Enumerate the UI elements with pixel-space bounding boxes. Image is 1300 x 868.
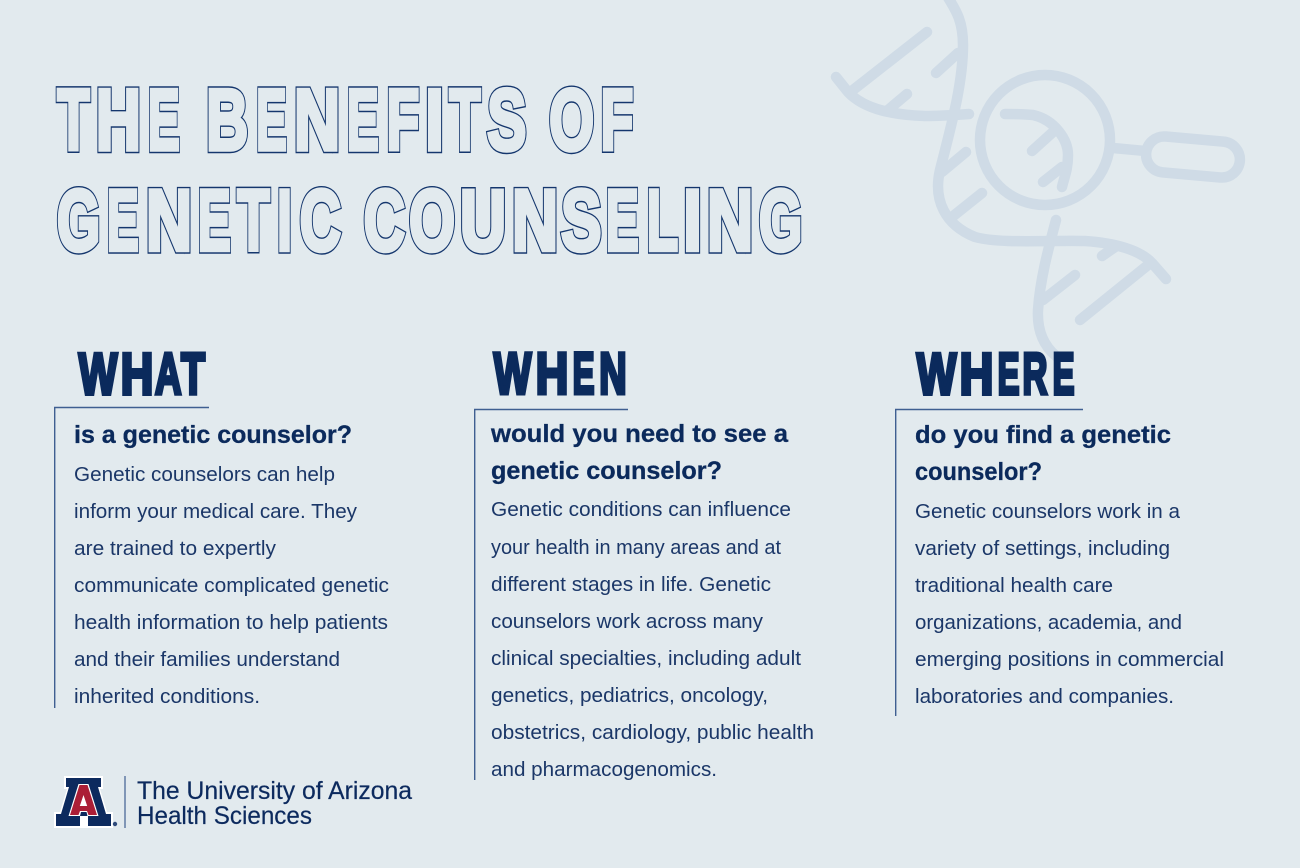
title: G [57,173,100,269]
body text: where [915,501,1224,708]
title: B [206,72,248,168]
title: F [387,72,419,168]
title: T [237,173,270,269]
wordmark: Health Sciences [137,802,312,830]
title: G [57,173,100,269]
title: T [57,72,90,168]
title: N [146,173,192,269]
title: T [449,72,480,168]
title: I [277,173,292,269]
title: E [256,72,287,168]
body text: when: different stages in life. Genetic [491,574,771,596]
body text: what: Genetic counselors can help [74,464,335,486]
title: E [347,72,379,168]
title: F [601,72,633,168]
body text: where: organizations, academia, and [915,612,1182,634]
title: H [96,72,141,168]
heading: WHEN: N [599,342,627,406]
title: C [300,173,341,269]
icon: DNA helix with magnifying glass [836,0,1241,356]
body text: when: obstetrics, cardiology, public health [491,722,814,744]
title: N [294,72,340,168]
body text: what: inherited conditions. [74,686,260,708]
title: E [606,173,639,269]
panel: what [55,342,389,708]
title: I [425,72,444,168]
title: E [107,173,139,269]
body text: where: Genetic counselors work in a [915,501,1181,523]
body text: what [74,464,389,708]
title: O [549,72,594,168]
heading: WHEN: H [536,342,568,406]
heading: WHEN: E [573,342,594,406]
bracket rule: when [475,410,628,780]
body text: when: your health in many areas and at [491,537,781,559]
heading: WHERE: E [1053,342,1074,407]
body text: where: laboratories and companies. [915,686,1174,708]
title: C [364,173,405,269]
title: F [601,72,633,168]
title: E [256,72,287,168]
title: N [294,72,340,168]
title: S [561,173,601,269]
title: F [387,72,419,168]
body text: what: are trained to expertly [74,538,276,560]
panel: when [475,342,814,781]
wordmark [137,777,412,830]
subheading: what: is a genetic counselor? [74,421,352,449]
bracket rule: where [896,410,1083,716]
title: T [237,173,270,269]
title: H [96,72,141,168]
title: C [364,173,405,269]
wordmark: The University of Arizona [137,777,412,805]
title: G [759,173,802,269]
body text: where: traditional health care [915,575,1113,597]
title: N [512,173,558,269]
title: T [57,72,90,168]
title: E [148,72,180,168]
title: I [683,173,702,269]
heading: WHAT: T [181,342,205,407]
title: S [561,173,601,269]
subheading: where: counselor? [915,458,1042,486]
panel: where [896,342,1224,716]
title: G [759,173,802,269]
title: O [409,173,455,269]
subheading: when: genetic counselor? [491,457,722,485]
title: T [449,72,480,168]
title: C [300,173,341,269]
title: S [487,72,526,168]
icon: block A [54,776,117,828]
subheading: when: would you need to see a [490,420,789,448]
body text: when: Genetic conditions can influence [491,499,791,521]
title: U [460,173,506,269]
heading: WHAT: A [155,342,182,407]
body text: when: clinical specialties, including adult [491,648,801,670]
title: E [198,173,231,269]
title: L [647,173,678,269]
heading: WHERE: R [1022,342,1047,407]
title: E [606,173,639,269]
title: O [549,72,594,168]
heading: WHAT: H [121,342,153,407]
title: N [707,173,753,269]
body text: when: and pharmacogenomics. [491,759,717,781]
title: N [512,173,558,269]
body text: where: variety of settings, including [915,538,1170,560]
title: E [148,72,180,168]
logo: University of Arizona Health Sciences [54,776,412,830]
heading: WHERE: E [998,342,1020,407]
title: I [683,173,702,269]
body text: what: health information to help patients [74,612,388,634]
body text: when: genetics, pediatrics, oncology, [491,685,768,707]
heading: WHERE: W [917,342,957,407]
title: N [707,173,753,269]
title: U [460,173,506,269]
title: I [425,72,444,168]
subheading: when [490,420,789,485]
title: E [107,173,139,269]
title: S [487,72,526,168]
title: I [277,173,292,269]
heading: WHAT: W [79,342,118,407]
body text: what: and their families understand [74,649,340,671]
bracket rule: what [55,408,209,708]
title: O [409,173,455,269]
title [57,72,802,269]
heading: WHEN: W [494,342,532,406]
title: N [146,173,192,269]
divider [124,776,126,828]
title: L [647,173,678,269]
body text: what: inform your medical care. They [74,501,357,523]
heading: WHERE: H [960,342,993,407]
body text: where: emerging positions in commercial [915,649,1224,671]
body text: when [491,499,814,781]
title: E [347,72,379,168]
body text: what: communicate complicated genetic [74,575,389,597]
title: E [198,173,231,269]
subheading: where: do you find a genetic [915,421,1171,449]
subheading: where [915,421,1171,486]
title: B [206,72,248,168]
body text: when: counselors work across many [491,611,763,633]
